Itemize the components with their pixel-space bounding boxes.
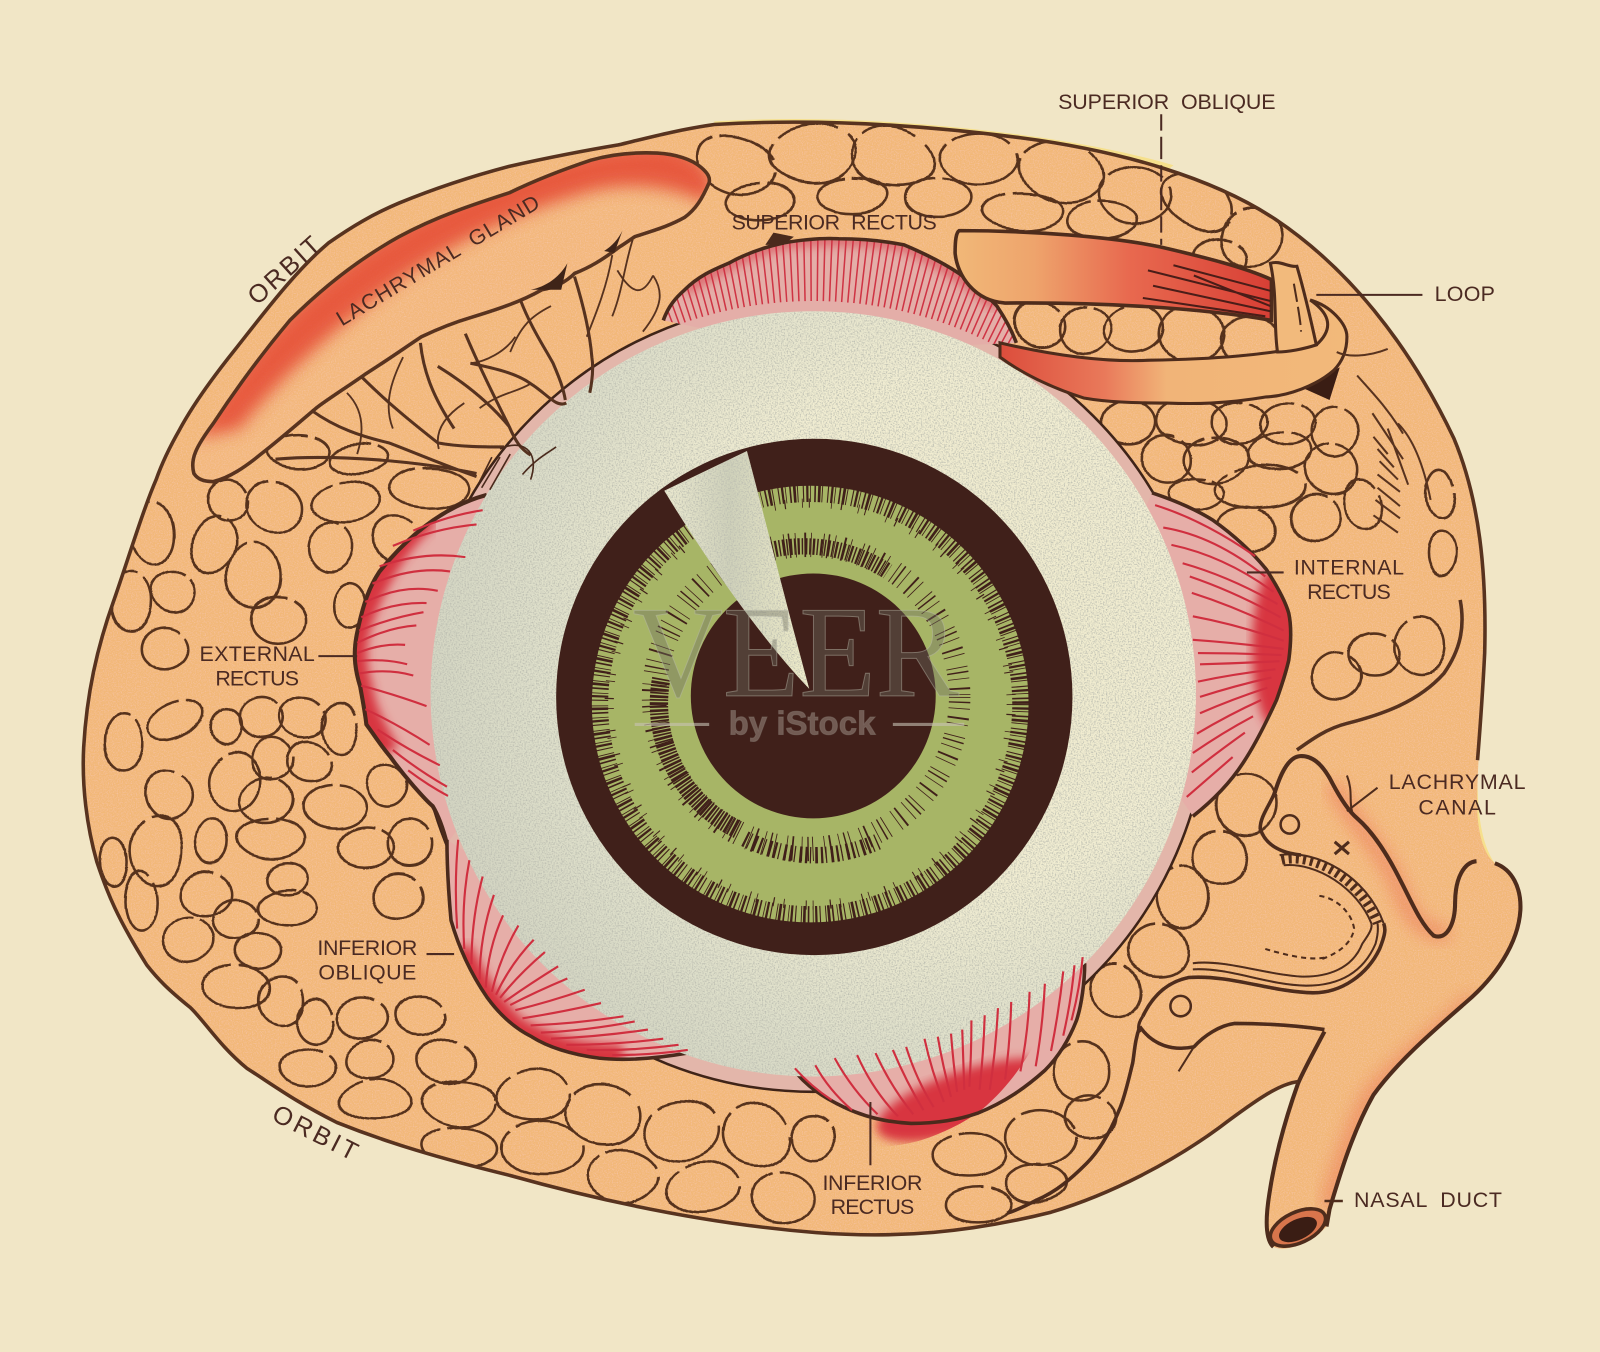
fatty lobules of the orbit — [100, 123, 1456, 1222]
orbit: outer orange body — [83, 119, 1520, 1249]
lachrymal sac and canals — [1139, 756, 1477, 1071]
label: orbit lower: ORBIT — [268, 1100, 362, 1166]
cornea flap: pale wedge over iris — [664, 451, 809, 689]
sclera corner stitch mark — [480, 445, 556, 490]
orbit outline — [83, 122, 1485, 1235]
label: inferior rectus with leader: RECTUS — [831, 1195, 914, 1219]
label: inferior oblique with leader: OBLIQUE — [318, 961, 416, 985]
label: lachrymal canal: LACHRYMAL — [1389, 770, 1526, 794]
label: external rectus with leader — [200, 642, 357, 691]
label: superior oblique with dashed leader: SUPERIOR OBLIQUE — [1058, 90, 1275, 114]
muscle: inferior rectus — [793, 963, 1085, 1159]
label: inferior oblique with leader: INFERIOR — [317, 936, 417, 960]
label: inferior rectus with leader — [822, 1102, 922, 1219]
label: internal rectus with leader — [1247, 555, 1404, 604]
watermark: by iStock — [729, 706, 876, 743]
label: loop with leader: LOOP — [1435, 282, 1495, 306]
conjunctiva: pale pink halo around the eyeball — [417, 300, 1209, 1092]
label: internal rectus with leader: INTERNAL — [1294, 555, 1404, 579]
muscle fibres radiating over sclera edge — [357, 505, 1284, 1116]
label: inferior rectus with leader: INFERIOR — [822, 1171, 922, 1195]
label: orbit upper: ORBIT — [242, 231, 326, 311]
label: external rectus with leader: RECTUS — [215, 667, 299, 691]
watermark: VEER — [633, 581, 959, 725]
superior oblique muscle — [955, 231, 1271, 320]
lobule sheath curve near internal rectus — [1297, 600, 1462, 750]
label: inferior oblique with leader — [317, 936, 454, 985]
muscle: internal rectus — [1152, 492, 1292, 818]
label: internal rectus with leader: RECTUS — [1307, 580, 1391, 604]
lachrymal gland — [193, 143, 713, 482]
muscle: inferior oblique — [447, 840, 688, 1059]
loop: trochlea tendon — [1000, 262, 1431, 533]
eyeball: sclera — [431, 311, 1196, 1076]
muscle: external rectus — [352, 492, 487, 844]
label: lachrymal canal: CANAL — [1418, 795, 1496, 819]
inner boundary of fat body — [1007, 1026, 1140, 1213]
label: external rectus with leader: EXTERNAL — [200, 642, 315, 666]
label: lachrymal canal — [1389, 770, 1526, 819]
label: nasal duct: NASAL DUCT — [1354, 1188, 1502, 1212]
infographic: eye and orbit anatomy — [81, 94, 1525, 1249]
muscle: superior rectus — [662, 232, 1018, 344]
label: superior rectus: SUPERIOR RECTUS — [732, 211, 937, 235]
iris and pupil — [556, 439, 1072, 955]
lachrymal gland ducts — [276, 277, 593, 477]
nasal duct — [1265, 863, 1520, 1254]
label: lachrymal gland: LACHRYMAL GLAND — [332, 190, 544, 331]
